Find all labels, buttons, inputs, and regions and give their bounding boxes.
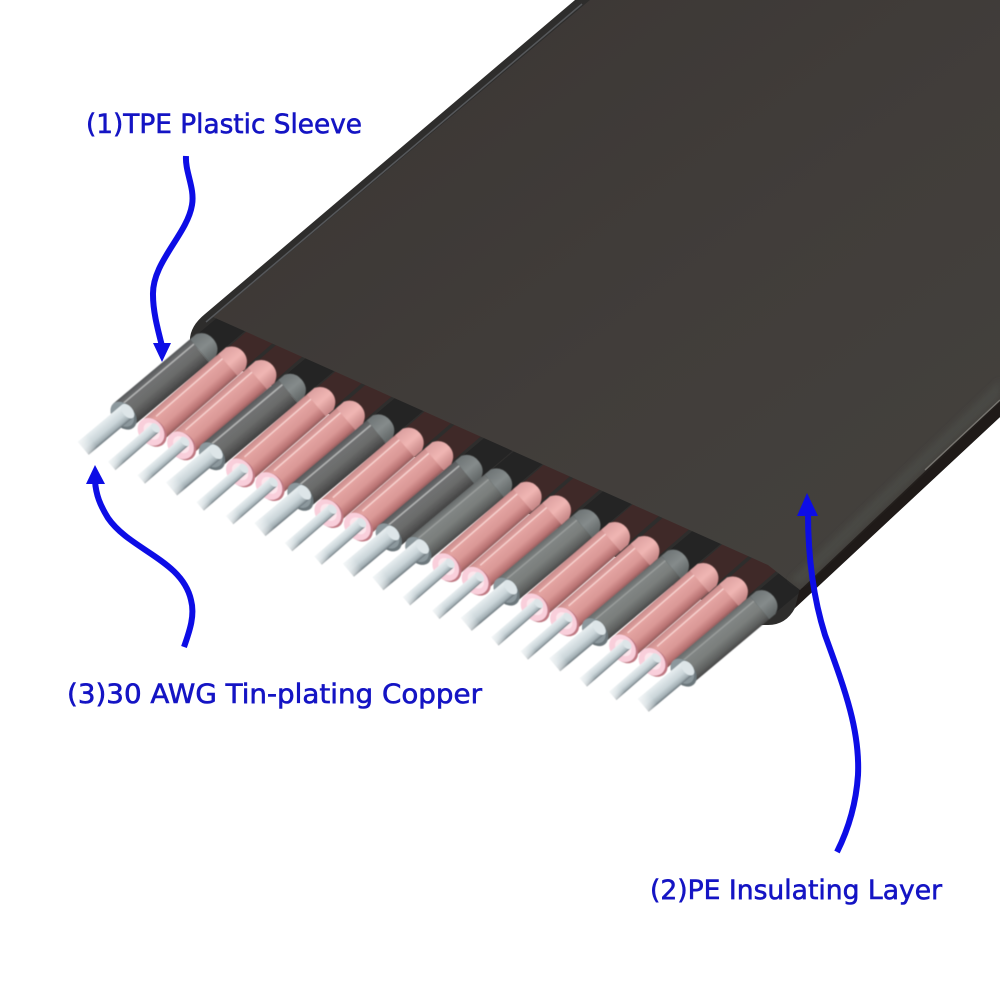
wire 11: gray — [365, 463, 519, 599]
sleeve soft edge band — [790, 380, 1000, 584]
wire 6: pink — [217, 395, 372, 536]
wire 1: gray — [70, 328, 224, 464]
wire 15: pink — [482, 516, 638, 657]
arrow: to TPE plastic sleeve — [153, 156, 193, 362]
wire 20: gray — [630, 585, 784, 721]
sleeve outer edge — [190, 0, 1000, 625]
wire 16: pink — [511, 530, 667, 671]
sleeve edge highlights — [206, 4, 582, 322]
wire 5: pink — [187, 381, 343, 522]
wire 18: pink — [570, 557, 726, 698]
wire group — [70, 328, 784, 721]
wire 12: pink — [394, 476, 549, 617]
wire 10: gray — [336, 449, 489, 585]
sleeve end caps — [191, 305, 811, 618]
wire 13: pink — [423, 489, 579, 631]
arrow: to PE insulating layer — [797, 493, 858, 852]
sleeve main surface — [213, 0, 1000, 590]
wire 14: gray — [453, 504, 607, 640]
wire 8: pink — [276, 422, 431, 563]
wire 7: gray — [247, 409, 401, 545]
arrow: to tin-plating copper — [86, 465, 192, 647]
wire 3: pink — [128, 354, 284, 495]
label: TPE plastic sleeve: (1)TPE Plastic Sleeve — [86, 109, 362, 140]
flat cable sleeve — [190, 0, 1000, 625]
wire 2: pink — [99, 340, 255, 482]
sleeve bottom edge band — [795, 398, 1000, 608]
wire 9: pink — [305, 435, 461, 576]
wire 19: pink — [600, 570, 756, 712]
wire 4: gray — [159, 368, 312, 504]
label: PE insulating layer: (2)PE Insulating Layer — [650, 875, 942, 906]
label: tin-plating copper: (3)30 AWG Tin-plating Copper — [67, 679, 482, 710]
wire 17: gray — [542, 544, 695, 680]
